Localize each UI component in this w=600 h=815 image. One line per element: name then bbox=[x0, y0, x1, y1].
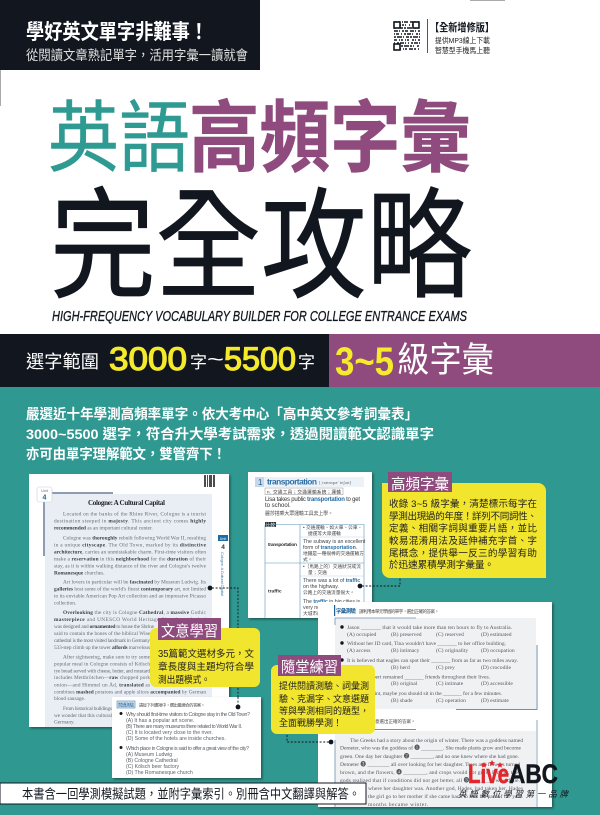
article body text: includes Mettbrötchen—raw chopped pork bbox=[54, 675, 150, 681]
comparison table: on the highway. bbox=[303, 584, 339, 590]
bottom note: 本書含一回學測模擬試題，並附字彙索引。別冊含中文翻譯與解答。 bbox=[22, 786, 360, 802]
quiz questions: Why should first-time visitors to Cologne stay in the Old Town? bbox=[126, 712, 250, 718]
title bbox=[48, 94, 472, 314]
practice passage: the girl go to her mother if she came back to him for part of the year. bbox=[368, 793, 524, 800]
comparison table bbox=[265, 522, 366, 618]
practice questions: (A) access bbox=[347, 647, 370, 654]
slogan banner bbox=[0, 0, 260, 70]
callout: vocabulary: 尾概念，提供舉一反三的學習有助 bbox=[389, 548, 537, 560]
level band: 級字彙 bbox=[397, 341, 494, 380]
callout: reading: 35篇範文選材多元，文 bbox=[158, 647, 254, 660]
article body text: onion—and Himmel un Äd, translated as bbox=[54, 682, 150, 688]
callout: vocabulary: 學測出現過的年度！詳列不同詞性、 bbox=[389, 510, 537, 522]
intro text bbox=[26, 406, 434, 462]
callout: practice bbox=[271, 655, 375, 734]
practice questions: (C) prey bbox=[436, 664, 455, 671]
article body text: Located on the banks of the Rhine River, Cologne is a tourist bbox=[63, 510, 207, 518]
article body text: masterpiece and UNESCO World Heritage Site, the cathedral bbox=[54, 617, 207, 623]
entry definition: 麗莎搭乘大眾運輸工具去上學。 bbox=[265, 510, 333, 517]
comparison table: transportation bbox=[268, 542, 297, 548]
callout: reading bbox=[150, 618, 260, 687]
bottom note bbox=[0, 783, 366, 804]
comparison table: The traffic in big cities is bbox=[303, 599, 361, 605]
QR code and edition note: 【全新增修版】 bbox=[430, 20, 494, 34]
unit tab: 4 bbox=[43, 494, 47, 502]
article body text: popular meal in Cologne consists of Kölsch bbox=[54, 660, 150, 668]
article body text: destination steeped in majesty. This ancient city comes highly bbox=[54, 518, 206, 524]
range band: 5500 bbox=[224, 341, 296, 377]
quiz questions: Which place in Cologne is said to offer a great view of the city? bbox=[126, 746, 249, 752]
connector arrow: article to reading callout bbox=[208, 586, 238, 705]
practice questions: (C) operation bbox=[436, 697, 466, 704]
callout: vocabulary: 收錄 3~5 級字彙，清楚標示每字在 bbox=[389, 498, 537, 510]
range band: 字 bbox=[298, 353, 315, 372]
practice passage: gods realized that if conditions did not get better, all ❺ ________ would die. bbox=[340, 776, 521, 784]
comparison table: There was a lot of traffic bbox=[303, 578, 360, 584]
title: 高頻字彙 bbox=[189, 94, 471, 182]
QR code and edition note: 智慧型手機馬上聽 bbox=[435, 46, 490, 55]
panel: reading article page bbox=[29, 474, 229, 727]
side tab bbox=[218, 535, 228, 596]
comparison table: 大城市的交通 bbox=[303, 610, 331, 617]
range band: 字 bbox=[190, 353, 207, 372]
practice questions: (D) crocodile bbox=[481, 664, 511, 671]
practice passage: green. One day her daughter ❷ ________, and no one knew where she had gone. bbox=[340, 752, 520, 760]
comparison table: •（馬路上的）交通狀況或流 bbox=[303, 563, 361, 570]
QR code and edition note bbox=[394, 19, 494, 55]
teal background panel bbox=[0, 387, 600, 815]
article body text: Romanesque churches. bbox=[54, 570, 105, 576]
practice questions: (D) estimate bbox=[481, 697, 509, 704]
callout: reading: 文意學習 bbox=[161, 622, 218, 640]
comparison table: 量；交通 bbox=[308, 569, 327, 576]
practice passage: where her daughter was. Another god, Hades, had taken her. Hades bbox=[368, 786, 523, 792]
callout: vocabulary: 較易混淆用法及延伸補充字首、字 bbox=[389, 535, 537, 547]
article heading: Cologne: A Cultural Capital bbox=[88, 499, 165, 507]
practice questions: Jason _______ that it would take more than ten hours to fly to Australia. bbox=[347, 624, 513, 631]
practice questions: Without her ID card, Tina wouldn't have _______ to her office building. bbox=[347, 640, 507, 647]
practice questions: (B) herd bbox=[391, 664, 410, 671]
entry definition: Lisa takes public transportation to get bbox=[265, 497, 360, 503]
practice questions: (C) reserved bbox=[436, 631, 464, 638]
practice questions: (D) accessible bbox=[481, 680, 513, 687]
article body text: Art lovers in particular will be fascinated by Museum Ludwig. Its bbox=[63, 580, 206, 586]
connector arrow: practice callout to passage bbox=[287, 735, 333, 744]
comparison table: very noisy bbox=[303, 605, 327, 611]
practice passage: months became winter. bbox=[368, 802, 429, 808]
article body text: collection. bbox=[54, 600, 76, 606]
article body text: make a reservation in this neighborhood for the duration of their bbox=[54, 556, 206, 562]
article body text bbox=[54, 510, 207, 726]
quiz header bbox=[117, 701, 205, 708]
level band: 3~5 bbox=[335, 340, 394, 384]
entry definition: to school. bbox=[265, 503, 291, 509]
practice questions: (C) originality bbox=[436, 647, 468, 654]
range band: ~ bbox=[207, 349, 224, 371]
quiz questions: (D) The Romanesque church bbox=[126, 770, 193, 776]
range band bbox=[0, 334, 329, 387]
icon: QR code bbox=[394, 22, 420, 50]
entry heading: 1 bbox=[258, 478, 263, 487]
article body text: Overlooking the city is Cologne Cathedral, a massive Gothic bbox=[63, 610, 207, 616]
entry heading: transportation bbox=[267, 476, 317, 486]
practice questions: (D) estimated bbox=[481, 631, 512, 638]
panel: reading quiz bbox=[112, 697, 261, 778]
quiz questions: (B) There are many museums there related to World War II. bbox=[126, 724, 242, 730]
side tab: Cologne: A Cultural Capital bbox=[220, 552, 225, 596]
practice questions: It is believed that eagles can spot their _______ from as far as two miles away. bbox=[347, 657, 519, 664]
title: 完全攻略 bbox=[50, 180, 472, 314]
quiz header: 請從下列選項中，選出最適合的答案。 bbox=[139, 702, 205, 708]
unit tab bbox=[37, 487, 52, 502]
panel: dictionary entry bbox=[248, 472, 372, 618]
slogan banner: 從閱讀文章熟記單字，活用字彙一讀就會 bbox=[26, 47, 248, 63]
QR code and edition note: 提供MP3線上下載 bbox=[435, 36, 490, 45]
panel: practice exercises bbox=[318, 602, 552, 808]
callout: vocabulary bbox=[382, 472, 546, 578]
article body text: rye bread served with cheese, butter, and mustard bbox=[54, 668, 150, 674]
comparison table: traffic bbox=[268, 588, 282, 594]
article body text: cathedral is the most visited landmark in Germany bbox=[54, 638, 150, 644]
practice passage: Demeter, who was the goddess of ❶ ________. She made plants grow and become bbox=[340, 744, 522, 752]
callout: vocabulary: 高頻字彙 bbox=[391, 476, 449, 493]
article body text: From historical buildings bbox=[63, 706, 112, 712]
practice questions: (A) occupied bbox=[347, 631, 377, 638]
level band bbox=[329, 334, 600, 387]
quiz header: 閱讀測驗 bbox=[118, 702, 134, 708]
quiz questions: (A) Museum Ludwig bbox=[126, 752, 172, 758]
article body text: Cologne was thoroughly rebuilt following World War II, resulting bbox=[63, 534, 206, 542]
article body text: After sightseeing, make sure to try some bbox=[63, 654, 151, 660]
quiz questions: (C) It is located very close to the river. bbox=[126, 730, 213, 736]
practice passage bbox=[340, 737, 524, 808]
logo: LiveABC bbox=[458, 759, 569, 799]
comparison table: 公路上的交通流量很大。 bbox=[303, 589, 355, 596]
quiz questions: (A) It has a popular art scene. bbox=[126, 718, 194, 724]
entry definition bbox=[265, 488, 360, 517]
logo: LiveABC: Live bbox=[468, 759, 509, 789]
callout: practice: 隨堂練習 bbox=[281, 659, 338, 676]
callout: reading: 測出題模式。 bbox=[158, 673, 210, 686]
quiz questions: (D) Some of the hotels are inside churches. bbox=[126, 736, 226, 742]
practice header bbox=[334, 605, 439, 616]
entry heading: [ˌtrænspɚˈteʃən] bbox=[319, 480, 351, 485]
practice questions: If you feel faint, maybe you should sit in the _______ for a few minutes. bbox=[347, 690, 503, 697]
article body text: was designed and ornamented to house the Shrine bbox=[54, 624, 155, 630]
callout: practice: 驗、克漏字、文意選題 bbox=[279, 693, 369, 704]
quiz questions bbox=[120, 712, 250, 776]
entry definition: n. 交通工具；交通運輸系統；運輸 bbox=[267, 488, 341, 496]
quiz questions: (B) Cologne Cathedral bbox=[126, 758, 178, 764]
article body text: 533-step climb up the tower affords marvelous bbox=[54, 645, 150, 651]
title: 英語 bbox=[48, 94, 190, 182]
article body text: Germany. bbox=[54, 720, 75, 726]
icon: page QR code bbox=[204, 476, 216, 486]
intro text: 嚴選近十年學測高頻率單字。依大考中心「高中英文參考詞彙表」 bbox=[26, 406, 418, 422]
unit tab: Unit bbox=[41, 489, 48, 493]
comparison table: 捷運等大眾運輸 bbox=[308, 530, 341, 537]
quiz questions: (C) Kölsch beer factory bbox=[126, 764, 179, 770]
practice questions: (D) occupation bbox=[481, 647, 515, 654]
callout: vocabulary: 於迅速累積學測字彙量。 bbox=[389, 559, 494, 571]
callout: practice: 等與學測相同的題型， bbox=[279, 705, 369, 716]
slogan banner: 學好英文單字非難事！ bbox=[26, 20, 208, 44]
article body text: in a unique cityscape. The Old Town, marked by its distinctive bbox=[54, 542, 207, 548]
practice passage: Demeter ❸ ________ all over looking for her daughter. Trees and flowers turned bbox=[340, 760, 520, 768]
article body text: we wonder that this cultural bbox=[54, 713, 113, 719]
comparison table: 式。 bbox=[303, 556, 312, 562]
callout: practice: 全面戰勝學測！ bbox=[279, 717, 342, 728]
callout: vocabulary: 定義、相關字詞與重要片語，並比 bbox=[389, 522, 537, 534]
panel: practice exercises: 意選出正確的答案。 bbox=[375, 718, 416, 725]
practice passage: brown, and the flowers, ❹ ________, and crops would not grow. Finally, the bbox=[340, 768, 519, 776]
article body text: to its enviable American Pop Art collection and an impressive Picasso bbox=[54, 594, 206, 600]
practice questions: Tom and Albert remained _______ friends throughout their lives. bbox=[347, 674, 491, 680]
article body text: combines mashed potatoes and apple slices accompanied by German bbox=[54, 690, 206, 696]
intro text: 3000~5500 選字，符合升大學考試需求，透過閱讀範文認識單字 bbox=[26, 426, 434, 442]
practice header: 請利用本單元學過的單字，選出正確的答案。 bbox=[359, 608, 439, 615]
range band: 選字範圍 bbox=[26, 352, 99, 372]
comparison table: 地鐵是一種很棒的交通運輸方 bbox=[303, 550, 364, 557]
connector arrow: dictionary to vocabulary callout bbox=[358, 577, 400, 588]
side tab: 4 bbox=[221, 544, 225, 551]
practice questions: (B) original bbox=[391, 680, 418, 687]
side tab: Unit bbox=[220, 537, 226, 541]
entry heading bbox=[255, 476, 364, 487]
callout: reading: 章長度與主題均符合學 bbox=[158, 660, 254, 673]
intro text: 亦可由單字理解範文，雙管齊下！ bbox=[26, 446, 226, 462]
practice passage: The Greeks had a story about the origin of winter. There was a goddess named bbox=[350, 737, 523, 744]
logo: LiveABC: 英語數位學習第一品牌 bbox=[458, 789, 569, 799]
article body text: galleries host some of the world's finest contemporary art, not limited bbox=[54, 586, 206, 592]
article body text: recommended as an important cultural center. bbox=[54, 526, 153, 532]
practice questions bbox=[340, 624, 519, 704]
logo: LiveABC: ABC bbox=[509, 759, 558, 789]
comparison table: 比較 bbox=[266, 522, 275, 528]
practice questions: (B) intimacy bbox=[391, 647, 420, 654]
comparison table: • 交通運輸、如火車、公車、 bbox=[303, 524, 362, 531]
article body text: architecture, carries an unmistakable charm. First-time visitors often bbox=[54, 548, 206, 556]
article body text: said to contain the bones of the biblical Wise bbox=[54, 630, 151, 637]
comparison table: The subway is an excellent bbox=[303, 539, 366, 545]
practice questions: (B) preserved bbox=[391, 631, 422, 638]
article body text: stay, as it is within walking distance of the river and Cologne's twelve bbox=[54, 562, 207, 570]
practice questions: (B) shade bbox=[391, 697, 413, 704]
practice questions: (C) intimate bbox=[436, 680, 464, 687]
comparison table: form of transportation. bbox=[303, 545, 357, 551]
callout: practice: 提供閱讀測驗、詞彙測 bbox=[279, 680, 369, 691]
practice header: 字彙測驗 bbox=[336, 607, 356, 615]
range band: 3000 bbox=[109, 341, 187, 377]
article body text: blood sausage. bbox=[54, 696, 85, 702]
